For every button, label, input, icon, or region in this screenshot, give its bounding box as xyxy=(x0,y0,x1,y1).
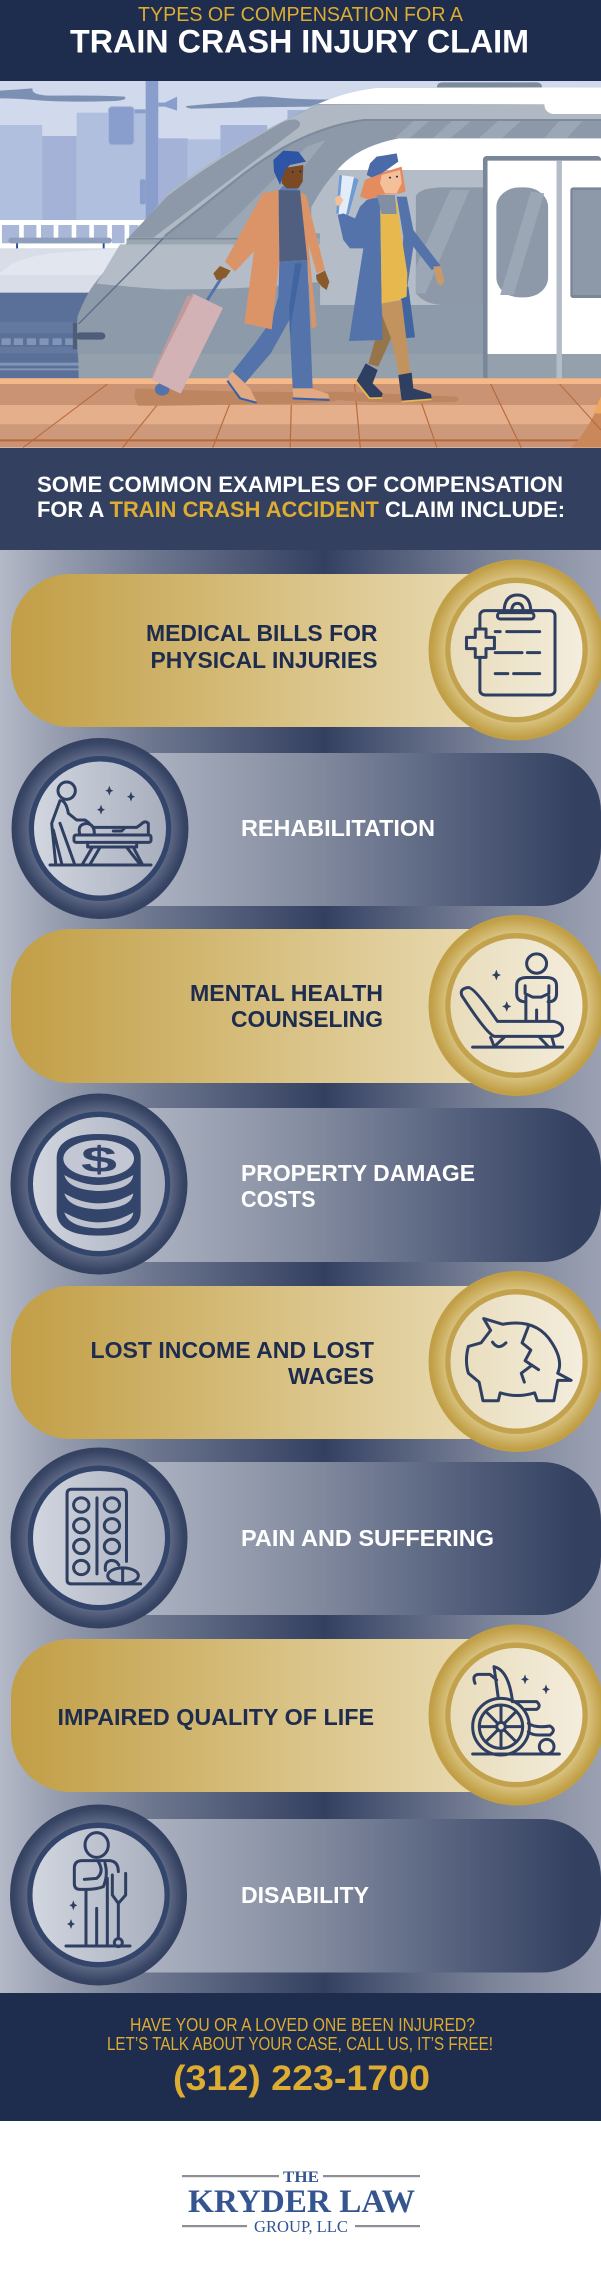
header banner xyxy=(0,0,601,81)
label: lost income and lost wages: LOST INCOME AND LOST xyxy=(90,1337,375,1363)
label: disability: DISABILITY xyxy=(241,1882,369,1908)
icon: pill blister pack xyxy=(67,1489,141,1584)
icon: dollar sign: $ xyxy=(81,1139,117,1180)
intro band: FOR A TRAIN CRASH ACCIDENT CLAIM INCLUDE: xyxy=(37,497,565,522)
icon: coin stack xyxy=(57,1134,141,1236)
roof hatch xyxy=(437,82,542,87)
ground shadow xyxy=(135,388,459,406)
trousers xyxy=(233,260,313,388)
item 6: pain and suffering xyxy=(10,1448,601,1628)
coat xyxy=(338,197,383,341)
logo: The Kryder Law Group, LLC: KRYDER LAW xyxy=(188,2184,415,2220)
scarf xyxy=(377,195,397,214)
footer call to action xyxy=(0,1993,601,2121)
hair xyxy=(360,167,406,200)
gradient list background xyxy=(0,550,601,1993)
item 5: lost income and lost wages xyxy=(11,1271,601,1452)
icon: clipboard xyxy=(466,595,555,695)
shirt xyxy=(279,190,307,262)
item 8: disability xyxy=(10,1804,601,1986)
label: property damage costs xyxy=(241,1160,475,1212)
main title: TRAIN CRASH INJURY CLAIM xyxy=(70,24,529,60)
platform xyxy=(0,378,601,448)
intro band xyxy=(0,448,601,550)
suitcase xyxy=(153,295,222,396)
item 7: impaired quality of life xyxy=(11,1624,601,1806)
signal pole xyxy=(108,81,177,221)
label: property damage costs: COSTS xyxy=(241,1186,316,1212)
fence and bench xyxy=(0,220,146,253)
lower grey band xyxy=(126,238,322,244)
label: mental health counseling: MENTAL HEALTH xyxy=(190,980,383,1006)
icon: wheelchair xyxy=(473,1667,559,1755)
tracks xyxy=(0,293,92,378)
icon: massage therapy table xyxy=(50,782,151,865)
label: impaired quality of life: IMPAIRED QUALITY OF LIFE xyxy=(58,1704,374,1730)
icon: broken piggy bank xyxy=(466,1319,571,1401)
label: pain and suffering: PAIN AND SUFFERING xyxy=(241,1525,494,1551)
logo: The Kryder Law Group, LLC xyxy=(182,2169,420,2236)
legs xyxy=(368,313,392,367)
lower skirt xyxy=(79,354,483,379)
label: medical bills: MEDICAL BILLS FOR xyxy=(146,620,378,646)
dress xyxy=(380,200,407,303)
head xyxy=(282,165,303,188)
item 3: mental health counseling xyxy=(11,915,601,1096)
coupling xyxy=(73,323,77,349)
upper grey nose xyxy=(130,105,601,238)
far platform xyxy=(0,248,123,295)
label: property damage costs: PROPERTY DAMAGE xyxy=(241,1160,475,1186)
nose line xyxy=(79,238,163,324)
face xyxy=(380,170,402,193)
intro text: SOME COMMON EXAMPLES OF COMPENSATION xyxy=(37,472,563,497)
label: mental health counseling: COUNSELING xyxy=(231,1006,383,1032)
coat xyxy=(225,195,262,272)
clouds xyxy=(0,88,330,109)
coat back panel xyxy=(400,287,415,338)
man walking xyxy=(207,151,329,403)
label: lost income and lost wages xyxy=(90,1337,375,1389)
city skyline xyxy=(0,110,307,223)
hands xyxy=(213,266,231,280)
call to action text: HAVE YOU OR A LOVED ONE BEEN INJURED? xyxy=(130,2015,475,2035)
label: lost income and lost wages: WAGES xyxy=(288,1363,374,1389)
train body xyxy=(73,82,601,379)
white roof xyxy=(318,87,601,114)
beret xyxy=(367,153,398,177)
label: medical bills: PHYSICAL INJURIES xyxy=(150,647,378,673)
ticket xyxy=(336,175,359,216)
windscreen xyxy=(165,120,601,238)
label: rehabilitation: REHABILITATION xyxy=(241,815,435,841)
nose frame band xyxy=(128,119,300,238)
item 2: rehabilitation xyxy=(12,738,601,919)
woman with ticket xyxy=(335,153,444,402)
logo: The Kryder Law Group, LLC: GROUP, LLC xyxy=(254,2217,348,2236)
item 1: medical bills xyxy=(11,560,601,740)
icon: person with crutch and sling xyxy=(66,1833,130,1947)
label: mental health counseling xyxy=(190,980,383,1032)
hands xyxy=(335,195,343,206)
boots xyxy=(357,363,383,397)
label: medical bills xyxy=(146,620,378,673)
suitcase handle xyxy=(207,276,223,300)
door xyxy=(483,156,601,379)
item 4: property damage costs xyxy=(10,1094,601,1274)
doorway region xyxy=(337,138,601,173)
footer call to action: LET’S TALK ABOUT YOUR CASE, CALL US, IT’S FREE! xyxy=(107,2034,493,2054)
white footer area xyxy=(0,2121,601,2287)
icon: therapist and couch xyxy=(461,954,563,1047)
shoes xyxy=(228,372,257,402)
logo: The Kryder Law Group, LLC: THE xyxy=(283,2169,319,2186)
phone number: (312) 223-1700 xyxy=(173,2059,430,2098)
header kicker: TYPES OF COMPENSATION FOR A xyxy=(138,4,464,26)
